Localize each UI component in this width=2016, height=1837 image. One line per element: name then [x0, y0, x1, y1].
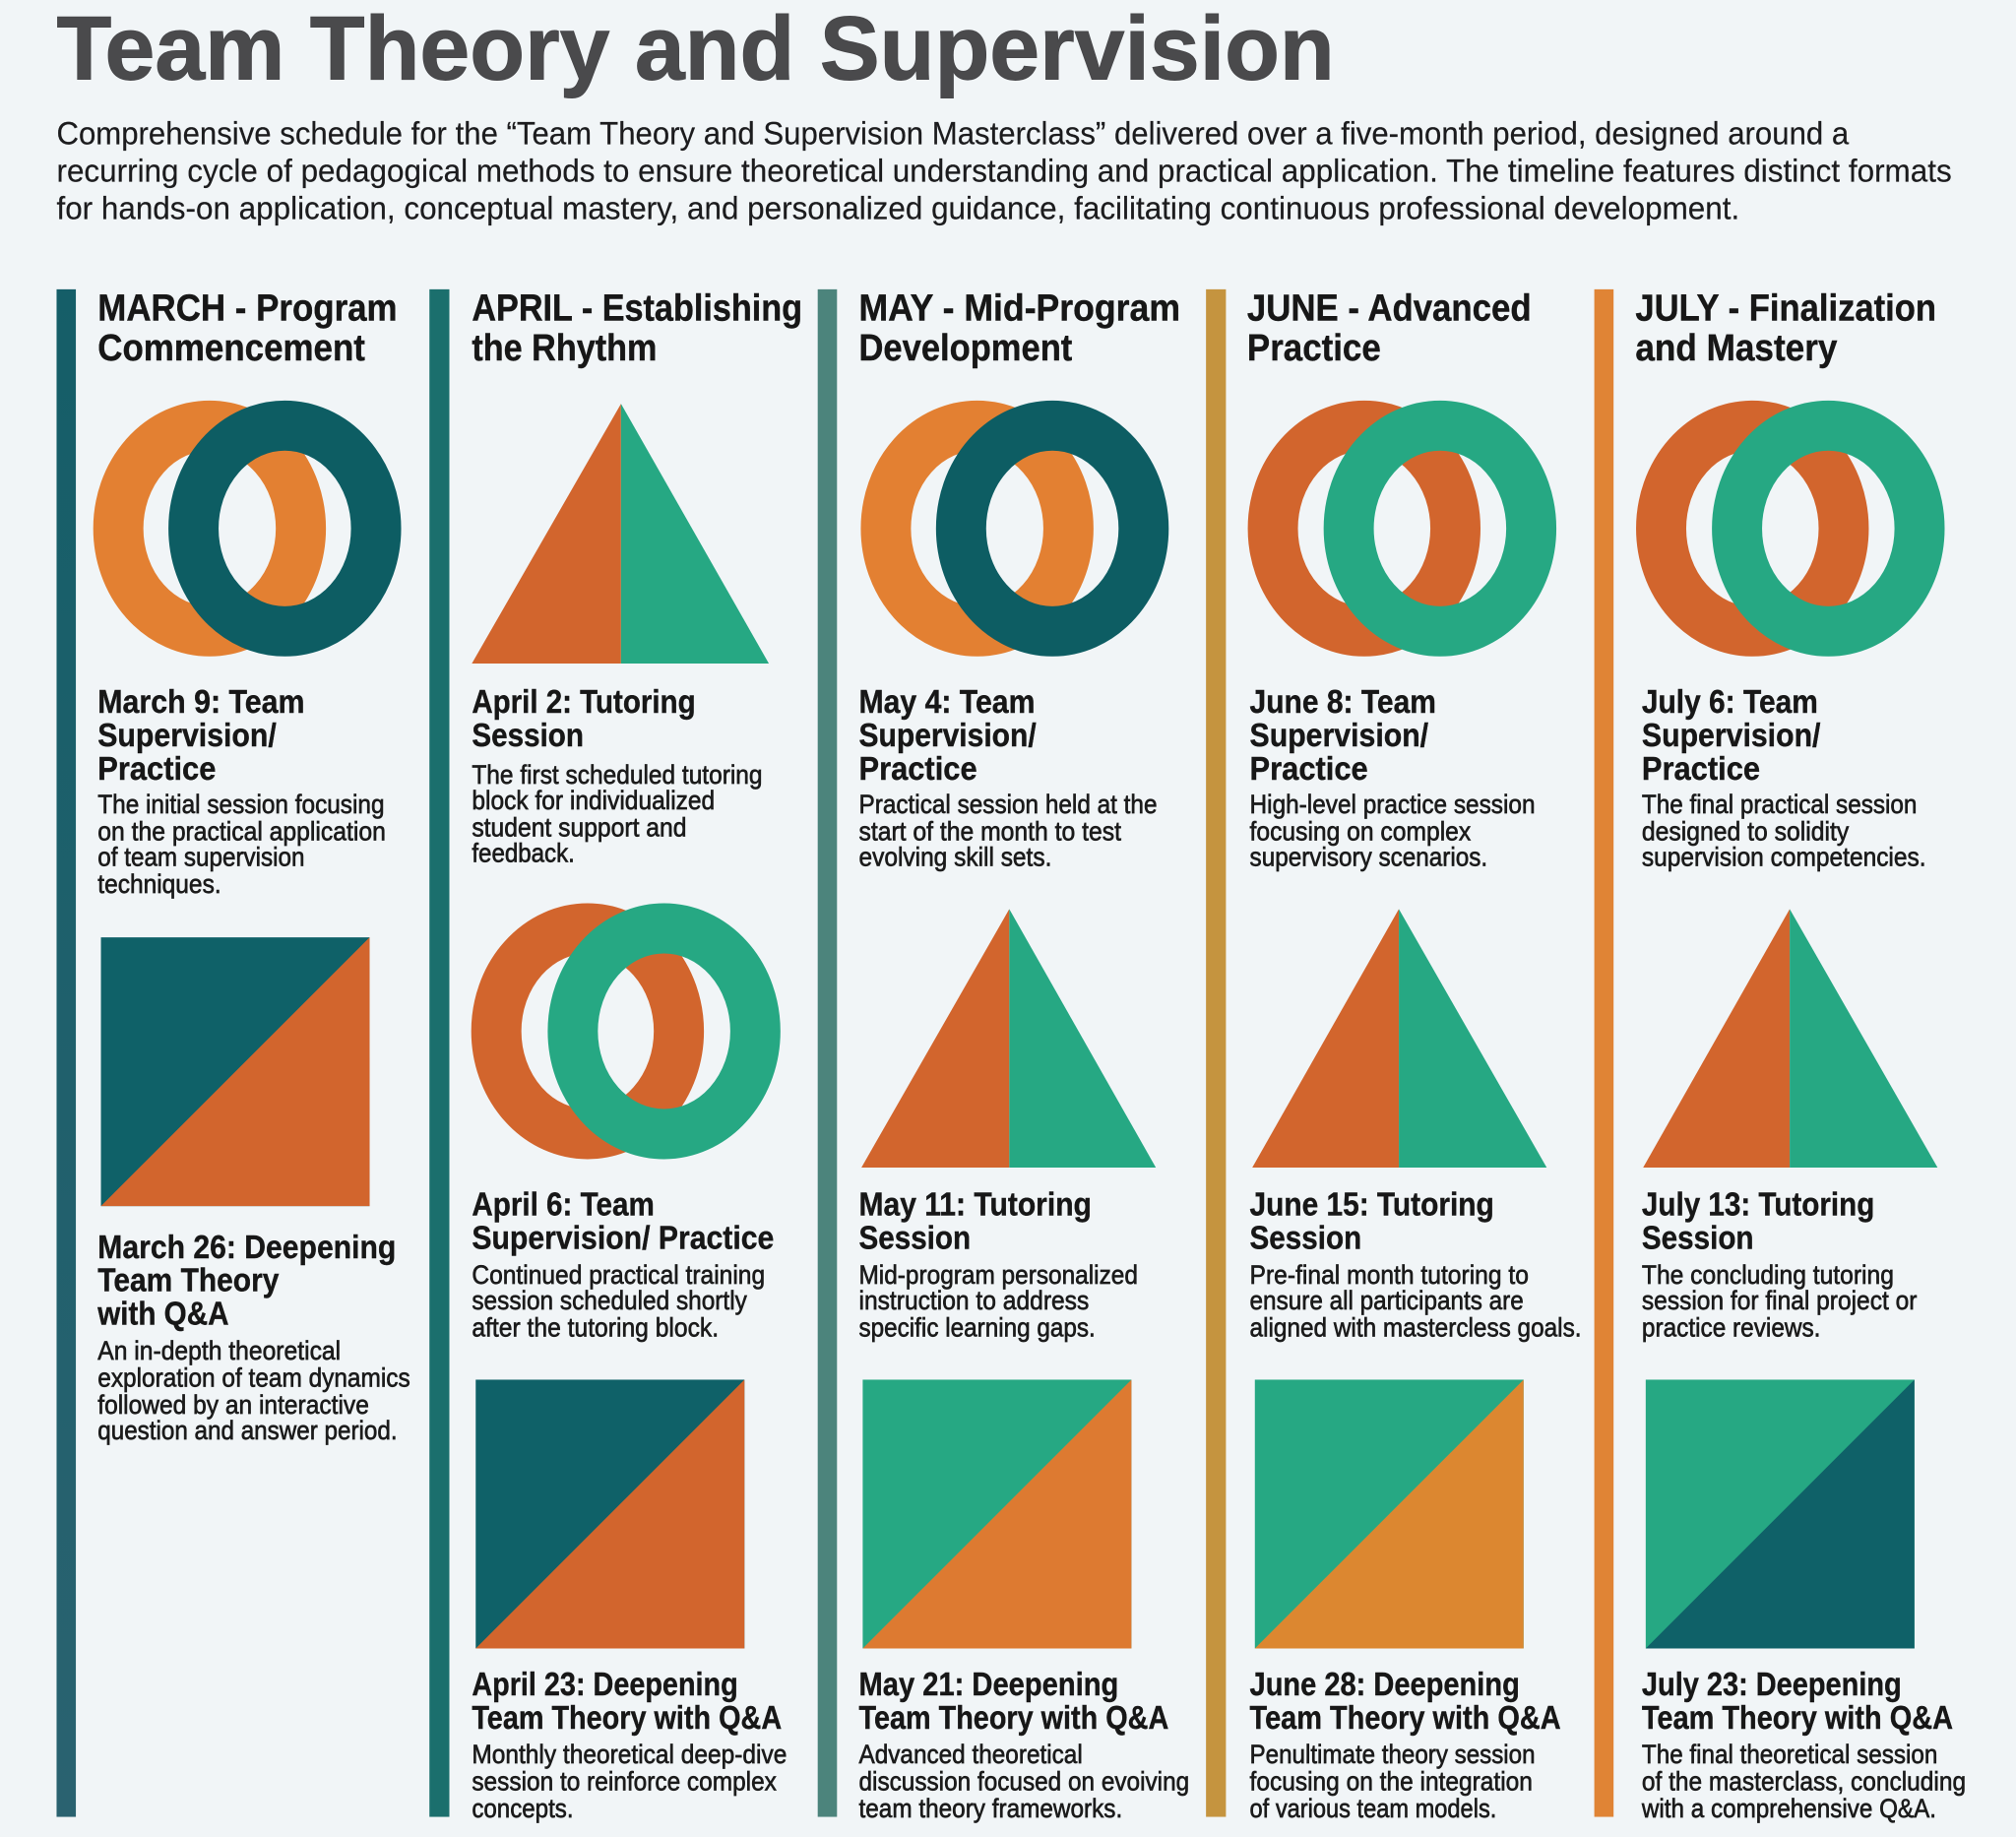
session: March 9: Practice — [97, 751, 216, 788]
session: July 23: July 23: Deepening — [1642, 1667, 1902, 1703]
session: May 11: Mid-program personalized — [858, 1260, 1138, 1290]
session: May 11: Session — [858, 1221, 971, 1257]
session: April 23: April 23: Deepening — [472, 1667, 738, 1703]
session: July 6: The final practical session — [1642, 790, 1917, 819]
session: April 2: block for individualized — [472, 786, 715, 815]
session: April 6: Supervision/ Practice — [472, 1221, 774, 1257]
session: July 6: supervision competencies. — [1642, 842, 1926, 871]
session: May 21: Team Theory with Q&A — [858, 1700, 1168, 1737]
title: Team Theory and Supervision — [56, 0, 1335, 99]
March heading: Commencement — [97, 328, 365, 369]
icon: diagonal square, teal and orange — [475, 1379, 744, 1648]
session: June 8 — [1250, 684, 1536, 871]
icon: interlocking rings, orange and green — [1273, 425, 1532, 631]
session: April 6: session scheduled shortly — [472, 1286, 747, 1315]
icon: diagonal square, teal and orange — [101, 937, 370, 1206]
June heading: Practice — [1247, 328, 1381, 369]
session: June 8: Supervision/ — [1250, 718, 1428, 754]
panel: March — [56, 288, 410, 1817]
session: June 8: focusing on complex — [1250, 816, 1472, 846]
session: June 8: supervisory scenarios. — [1250, 842, 1487, 871]
panel: June — [1206, 288, 1582, 1823]
session: April 23: Team Theory with Q&A — [472, 1700, 782, 1737]
intro paragraph: Comprehensive schedule for the “Team Theory and Supervision Masterclass” delivered over a five-month period, designed around a — [56, 116, 1849, 152]
March heading — [97, 288, 398, 369]
session: May 4: Supervision/ — [858, 718, 1037, 754]
session: March 26: with Q&A — [96, 1297, 228, 1333]
session: July 13: practice reviews. — [1642, 1312, 1820, 1342]
April heading — [472, 288, 802, 369]
July heading — [1635, 288, 1936, 369]
icon: interlocking rings, orange and green — [1662, 425, 1920, 631]
session: June 8: High-level practice session — [1250, 790, 1536, 819]
intro paragraph: recurring cycle of pedagogical methods to ensure theoretical understanding and practical application. The timeline features distinct formats — [56, 154, 1952, 189]
session: March 9: Supervision/ — [97, 718, 277, 754]
session: May 21: discussion focused on evoiving — [858, 1767, 1189, 1797]
icon: split triangle — [1643, 909, 1937, 1168]
April heading: the Rhythm — [472, 328, 657, 369]
icon: diagonal square, green and teal — [1646, 1379, 1915, 1648]
icon: interlocking rings, orange and green — [496, 928, 755, 1134]
session: June 8: June 8: Team — [1250, 684, 1436, 721]
session: April 6 — [472, 1187, 774, 1342]
session: May 4: May 4: Team — [858, 684, 1035, 721]
May heading — [858, 288, 1180, 369]
session: July 6: Supervision/ — [1642, 718, 1820, 754]
April timeline bar — [429, 289, 449, 1817]
session: March 26: question and answer period. — [97, 1416, 398, 1445]
session: May 4: Practice — [858, 751, 977, 788]
session: March 9: techniques. — [97, 869, 221, 899]
intro paragraph — [56, 116, 1952, 225]
session: March 9: on the practical application — [97, 816, 386, 846]
June heading — [1247, 288, 1532, 369]
session: April 2: The first scheduled tutoring — [472, 760, 763, 790]
May timeline bar — [818, 289, 837, 1817]
session: June 15: aligned with mastercless goals. — [1250, 1312, 1582, 1342]
session: April 2: Session — [472, 718, 584, 754]
March heading: MARCH - Program — [97, 288, 398, 330]
session: July 23 — [1641, 1667, 1966, 1823]
session: July 13: July 13: Tutoring — [1642, 1187, 1874, 1224]
icon: diagonal square, green and orange — [1255, 1379, 1524, 1648]
session: June 8: Practice — [1250, 751, 1368, 788]
icon: interlocking rings, orange and teal — [886, 425, 1144, 631]
session: March 26 — [96, 1230, 410, 1445]
session: May 4 — [858, 684, 1158, 871]
session: June 15: June 15: Tutoring — [1250, 1187, 1494, 1224]
May heading: Development — [858, 328, 1073, 369]
session: May 21 — [858, 1667, 1189, 1823]
session: March 9 — [97, 684, 386, 899]
session: July 23: The final theoretical session — [1642, 1740, 1937, 1769]
session: June 28: June 28: Deepening — [1250, 1667, 1520, 1703]
session: April 23: concepts. — [472, 1794, 574, 1823]
July heading: JULY - Finalization — [1635, 288, 1936, 330]
session: July 23: of the masterclass, concluding — [1642, 1767, 1966, 1797]
session: July 6: Practice — [1642, 751, 1760, 788]
session: May 21: May 21: Deepening — [858, 1667, 1118, 1703]
session: April 23 — [472, 1667, 787, 1823]
session: July 13 — [1642, 1187, 1917, 1342]
session: March 9: The initial session focusing — [97, 790, 385, 819]
icon: split triangle — [1252, 909, 1546, 1168]
session: June 15: Session — [1250, 1221, 1361, 1257]
session: March 26: An in-depth theoretical — [97, 1336, 341, 1365]
session: June 15: Pre-final month tutoring to — [1250, 1260, 1529, 1290]
session: July 6: July 6: Team — [1642, 684, 1818, 721]
May heading: MAY - Mid-Program — [858, 288, 1180, 330]
April heading: APRIL - Establishing — [472, 288, 802, 330]
session: April 23: Monthly theoretical deep-dive — [472, 1740, 787, 1769]
session: May 4: start of the month to test — [858, 816, 1121, 846]
session: April 6: Continued practical training — [472, 1260, 765, 1290]
session: May 4: Practical session held at the — [858, 790, 1158, 819]
session: July 13: Session — [1642, 1221, 1754, 1257]
session: June 15: ensure all participants are — [1250, 1286, 1524, 1315]
session: April 6: April 6: Team — [472, 1187, 655, 1224]
session: June 28: focusing on the integration — [1250, 1767, 1533, 1797]
session: May 11: May 11: Tutoring — [858, 1187, 1092, 1224]
session: March 9: March 9: Team — [97, 684, 305, 721]
July heading: and Mastery — [1635, 328, 1837, 369]
session: April 2 — [472, 684, 763, 867]
icon: split triangle — [472, 404, 769, 664]
session: June 28: of various team models. — [1250, 1794, 1496, 1823]
icon: diagonal square, green and orange — [862, 1379, 1131, 1648]
session: July 6 — [1642, 684, 1926, 871]
session: March 26: followed by an interactive — [97, 1390, 369, 1420]
June heading: JUNE - Advanced — [1247, 288, 1532, 330]
session: June 28: Penultimate theory session — [1250, 1740, 1536, 1769]
panel: May — [818, 288, 1189, 1823]
session: May 11: instruction to address — [858, 1286, 1089, 1315]
session: March 26: exploration of team dynamics — [97, 1362, 410, 1392]
session: July 13: session for final project or — [1642, 1286, 1917, 1315]
intro paragraph: for hands-on application, conceptual mastery, and personalized guidance, facilitating continuous professional development. — [56, 190, 1739, 225]
June timeline bar — [1206, 289, 1226, 1817]
session: July 13: The concluding tutoring — [1642, 1260, 1894, 1290]
session: July 23: with a comprehensive Q&A. — [1641, 1794, 1936, 1823]
session: April 6: after the tutoring block. — [472, 1312, 719, 1342]
session: March 26: Team Theory — [97, 1263, 280, 1299]
session: June 15 — [1250, 1187, 1582, 1342]
session: March 9: of team supervision — [97, 842, 305, 871]
icon: interlocking rings, orange and teal — [118, 425, 376, 631]
session: June 28: Team Theory with Q&A — [1250, 1700, 1561, 1737]
icon: split triangle — [861, 909, 1156, 1168]
session: April 23: session to reinforce complex — [472, 1767, 777, 1797]
panel: April — [429, 288, 802, 1823]
panel: July — [1595, 288, 1966, 1823]
session: May 11: specific learning gaps. — [858, 1312, 1096, 1342]
July timeline bar — [1595, 289, 1613, 1817]
session: April 2: student support and — [472, 812, 686, 842]
session: May 21: Advanced theoretical — [858, 1740, 1083, 1769]
session: May 21: team theory frameworks. — [858, 1794, 1122, 1823]
session: March 26: March 26: Deepening — [97, 1230, 396, 1266]
March timeline bar — [56, 289, 76, 1817]
session: July 23: Team Theory with Q&A — [1642, 1700, 1953, 1737]
session: April 2: April 2: Tutoring — [472, 684, 696, 721]
session: May 4: evolving skill sets. — [858, 842, 1051, 871]
session: June 28 — [1250, 1667, 1561, 1823]
session: May 11 — [858, 1187, 1138, 1342]
session: April 2: feedback. — [472, 838, 575, 867]
session: July 6: designed to solidity — [1642, 816, 1850, 846]
